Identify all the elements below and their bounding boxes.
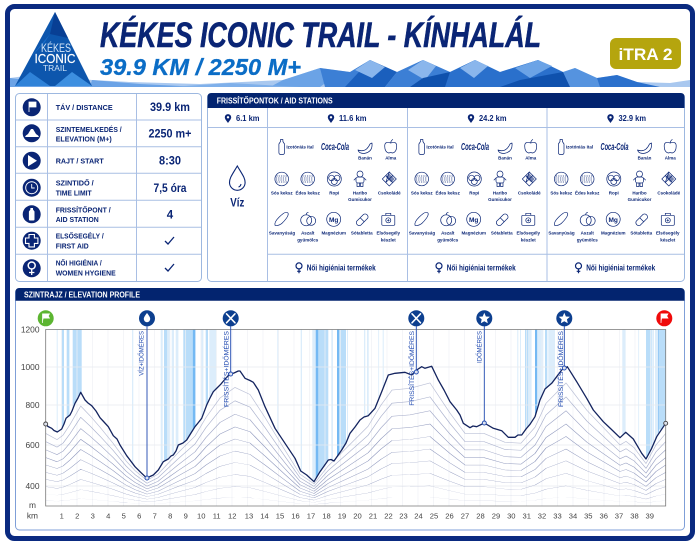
station 11.6 km: Mg <box>329 217 338 224</box>
station 24.2 km: Sós keksz <box>411 190 433 196</box>
logo: KÉKES <box>41 40 71 55</box>
station 11.6 km <box>269 113 401 273</box>
station 32.9 km: Édes keksz <box>575 188 600 196</box>
station 32.9 km: Női higiéniai termékek <box>586 264 656 272</box>
x axis labels: 15 <box>276 512 284 520</box>
station 11.6 km: Savanyúság <box>269 230 295 236</box>
water label: Víz <box>230 198 245 210</box>
x axis labels: 8 <box>168 512 172 520</box>
elevation chart <box>21 310 672 520</box>
logo: TRAIL <box>43 64 68 73</box>
y axis labels: 1000 <box>21 362 40 372</box>
station 24.2 km <box>409 113 541 273</box>
station 11.6 km: 11.6 km <box>339 113 367 123</box>
vertical checkpoint labels: IDŐMÉRES <box>475 331 484 363</box>
distance row <box>23 98 190 116</box>
x axis labels: 30 <box>507 512 516 520</box>
vertical checkpoint labels: FRISSÍTÉS+IDŐMÉRES <box>221 331 230 407</box>
x axis labels: 6 <box>137 512 141 520</box>
x axis labels: 29 <box>492 512 500 520</box>
x axis labels: 3 <box>91 512 95 520</box>
y axis labels: 600 <box>26 440 40 450</box>
x axis labels: 5 <box>122 512 126 520</box>
station 11.6 km: Alma <box>385 156 397 160</box>
vertical checkpoint labels <box>136 331 565 407</box>
x axis labels: 23 <box>399 512 408 520</box>
x axis labels <box>60 512 654 520</box>
x axis labels: 20 <box>353 512 362 520</box>
steep section bands <box>57 330 666 490</box>
x axis labels: 31 <box>522 512 531 520</box>
station 24.2 km: 24.2 km <box>479 113 507 123</box>
station 11.6 km: Banán <box>358 156 372 160</box>
time limit row <box>23 178 187 198</box>
station 32.9 km: Aszalt <box>581 230 594 236</box>
y axis labels: 1200 <box>21 324 40 334</box>
station 24.2 km: készlet <box>521 238 536 242</box>
elevation contour layers <box>46 383 666 504</box>
elevation line <box>46 366 666 482</box>
logo <box>15 12 92 86</box>
elevation row: SZINTEMELKEDÉS / <box>56 125 122 134</box>
station 11.6 km: Magnézium <box>321 230 346 236</box>
station 24.2 km: Sótabletta <box>491 230 513 236</box>
station 24.2 km: Csokoládé <box>518 190 541 196</box>
station 32.9 km: Izotóniás Ital <box>566 144 593 150</box>
aid stations heading: FRISSÍTŐPONTOK / AID STATIONS <box>217 96 333 106</box>
start row: 8:30 <box>159 156 181 168</box>
station 24.2 km: Édes keksz <box>436 188 461 196</box>
station 32.9 km: Haribo <box>632 190 647 196</box>
panel: elevation profile <box>16 288 684 530</box>
station 24.2 km: Női higiéniai termékek <box>447 264 516 272</box>
vertical checkpoint labels: FRISSÍTÉS+IDŐMÉRES <box>407 331 416 406</box>
x axis labels: 27 <box>461 512 469 520</box>
aid stations heading <box>208 93 684 108</box>
station 11.6 km: Csokoládé <box>378 190 401 196</box>
icon: start flag <box>38 310 54 326</box>
x axis labels: 34 <box>569 512 577 520</box>
station 24.2 km: gyümölcs <box>437 238 459 242</box>
hygiene row <box>23 258 174 278</box>
station 24.2 km: Savanyúság <box>409 230 435 236</box>
station 11.6 km: Sós keksz <box>271 190 293 196</box>
station 11.6 km: Aszalt <box>301 230 315 236</box>
station 24.2 km: Elsősegély <box>517 230 541 236</box>
first aid row: ELSŐSEGÉLY / <box>56 232 104 240</box>
station 24.2 km: Gumicukor <box>488 197 512 202</box>
elevation row: ELEVATION (M+) <box>56 134 112 144</box>
plot axes <box>46 330 666 506</box>
y axis labels <box>21 324 40 520</box>
distance row: 39.9 km <box>150 102 190 114</box>
time limit row: TIME LIMIT <box>56 188 92 198</box>
hygiene row: NŐI HIGIÉNIA / <box>56 258 102 268</box>
first aid row <box>23 232 174 250</box>
icon: finish flag <box>656 310 672 326</box>
station 11.6 km: gyümölcs <box>297 238 319 242</box>
x axis labels: 9 <box>184 512 188 520</box>
mountain range <box>10 60 690 87</box>
aid station row: AID STATION <box>56 215 99 224</box>
station 32.9 km: gyümölcs <box>577 238 598 242</box>
iTRA badge: iTRA 2 <box>618 45 672 64</box>
x axis labels: 17 <box>307 512 315 520</box>
x axis labels: 4 <box>106 512 110 520</box>
aid station row <box>23 205 174 224</box>
hygiene row: WOMEN HYGIENE <box>56 268 116 278</box>
title: KÉKES ICONIC TRAIL - KÍNHALÁL <box>100 15 541 55</box>
x axis labels: 35 <box>584 512 593 520</box>
header band <box>10 12 690 87</box>
y axis labels: 400 <box>26 481 40 491</box>
station 32.9 km: Coca-Cola <box>600 141 629 153</box>
station 11.6 km: Haribo <box>353 190 367 196</box>
station 32.9 km: Magnézium <box>601 230 625 236</box>
station 24.2 km: Banán <box>498 156 512 160</box>
station 24.2 km: Haribo <box>493 190 507 196</box>
x axis labels: 14 <box>260 512 269 520</box>
station 32.9 km: Sós keksz <box>550 190 573 196</box>
logo: ICONIC <box>34 51 76 66</box>
station 24.2 km: Coca-Cola <box>461 141 489 153</box>
x axis labels: 19 <box>338 512 346 520</box>
station 11.6 km: Elsősegély <box>377 230 401 236</box>
aid station row: FRISSÍTŐPONT / <box>56 206 111 214</box>
x axis labels: 33 <box>553 512 562 520</box>
vertical checkpoint labels: VÍZ+IDŐMÉRES <box>136 331 145 376</box>
station 24.2 km: Ropi <box>469 190 479 196</box>
station 11.6 km: Sótabletta <box>351 230 373 236</box>
icon: water marker <box>139 310 155 326</box>
station 11.6 km: Női higiéniai termékek <box>307 264 376 272</box>
elevation row <box>23 124 192 144</box>
station 24.2 km: Alma <box>525 156 537 160</box>
distance row: TÁV / DISTANCE <box>56 103 113 112</box>
x axis labels: 2 <box>75 512 79 520</box>
station 11.6 km: készlet <box>381 238 396 242</box>
time limit row: 7,5 óra <box>154 183 187 195</box>
station 32.9 km: Savanyúság <box>548 230 575 236</box>
x axis labels: 37 <box>615 512 623 520</box>
station 32.9 km: Sótabletta <box>630 230 653 236</box>
x axis labels: 16 <box>291 512 300 520</box>
station 32.9 km: 32.9 km <box>618 113 646 123</box>
station 11.6 km: Coca-Cola <box>321 141 349 153</box>
subtitle: 39.9 KM / 2250 M+ <box>100 54 301 80</box>
panel: race facts <box>16 94 202 282</box>
start row <box>23 152 181 170</box>
station 32.9 km: Alma <box>665 156 676 160</box>
aid station row: 4 <box>167 210 174 222</box>
x axis labels: 13 <box>245 512 253 520</box>
station 32.9 km: Mg <box>609 217 618 224</box>
time limit row: SZINTIDŐ / <box>56 178 95 188</box>
x axis labels: 11 <box>213 512 221 520</box>
station 24.2 km: Magnézium <box>461 230 486 236</box>
panel: aid stations <box>208 93 684 282</box>
icon: timing star <box>476 310 492 326</box>
vertical checkpoint labels: FRISSÍTÉS+IDŐMÉRES <box>556 331 565 407</box>
x axis labels: 10 <box>197 512 205 520</box>
station 32.9 km: Csokoládé <box>657 190 681 196</box>
x axis labels: 7 <box>153 512 157 520</box>
station 24.2 km: Mg <box>469 217 478 224</box>
station 24.2 km: Izotóniás Ital <box>426 144 454 150</box>
checkpoint lines <box>44 326 668 480</box>
station 24.2 km: Aszalt <box>441 230 455 236</box>
y axis labels: 800 <box>26 400 40 410</box>
x axis labels: 24 <box>414 512 423 520</box>
x axis labels: 12 <box>228 512 236 520</box>
station 32.9 km: Elsősegély <box>656 230 680 236</box>
station 11.6 km: Ropi <box>329 190 339 196</box>
station 32.9 km: Banán <box>638 156 652 160</box>
x axis labels: 21 <box>369 512 377 520</box>
x axis labels: 28 <box>476 512 485 520</box>
first aid row: FIRST AID <box>56 242 89 250</box>
x axis labels: 26 <box>445 512 454 520</box>
x axis labels: 38 <box>630 512 639 520</box>
station 11.6 km: Gumicukor <box>348 197 372 202</box>
x axis labels: 39 <box>645 512 654 520</box>
x axis labels: 1 <box>60 512 64 520</box>
iTRA badge <box>610 38 681 69</box>
elevation heading: SZINTRAJZ / ELEVATION PROFILE <box>24 290 141 300</box>
elevation heading <box>16 288 684 301</box>
station 32.9 km: Ropi <box>609 190 619 196</box>
station 11.6 km: Édes keksz <box>296 188 321 196</box>
x axis labels: 18 <box>322 512 331 520</box>
icon: food marker 2 <box>408 310 424 326</box>
station 6.1 km: 6.1 km <box>236 113 260 123</box>
x axis labels: 32 <box>538 512 546 520</box>
station 32.9 km: Gumicukor <box>628 197 652 202</box>
x axis labels: 36 <box>599 512 608 520</box>
station 32.9 km <box>548 113 681 273</box>
icon: water drop <box>230 166 245 190</box>
station 6.1 km <box>225 113 260 210</box>
y axis labels: km <box>27 510 38 520</box>
station 11.6 km: Izotóniás Ital <box>286 144 314 150</box>
x axis labels: 25 <box>430 512 438 520</box>
icon: food marker <box>223 310 239 326</box>
station 32.9 km: készlet <box>660 238 676 242</box>
elevation row: 2250 m+ <box>148 128 192 140</box>
y axis labels: m <box>29 500 36 510</box>
x axis labels: 22 <box>384 512 393 520</box>
start row: RAJT / START <box>56 156 104 166</box>
icon: timing star 2 <box>556 310 572 326</box>
